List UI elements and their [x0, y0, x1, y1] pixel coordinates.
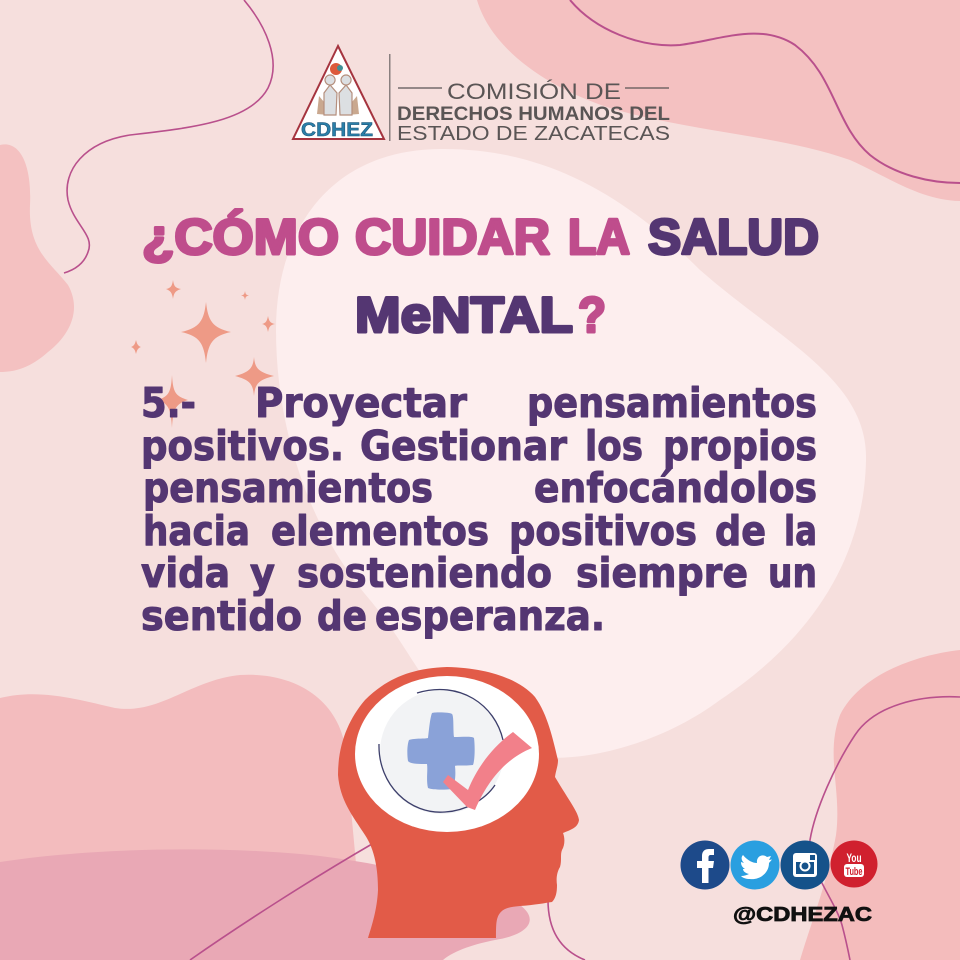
- title: LA: [568, 209, 630, 265]
- icon: head with cross and check: [338, 667, 579, 938]
- title: MeNTAL: [355, 287, 573, 343]
- body text: pensamientos: [143, 464, 433, 512]
- curve: bottom left: [190, 844, 372, 960]
- icons: social media: [680, 840, 878, 890]
- body text: 5.-: [141, 379, 196, 427]
- body text: siempre: [576, 549, 748, 597]
- title: CUIDAR: [355, 209, 550, 265]
- body text: vida: [141, 549, 230, 597]
- title: ?: [578, 287, 606, 343]
- body text: un: [768, 549, 817, 597]
- grey circle: [380, 690, 504, 814]
- body text: sentido: [141, 592, 302, 640]
- sparkles: [131, 280, 275, 428]
- check mark: [443, 732, 532, 810]
- blob: central light shape: [276, 149, 866, 758]
- body text: de: [715, 507, 766, 555]
- title: [142, 209, 819, 343]
- logo: organisation name: COMISIÓN DE: [447, 79, 621, 104]
- body text: la: [784, 507, 817, 555]
- logo: organisation name: [397, 79, 670, 145]
- curve: top left: [64, 0, 273, 273]
- blob: bottom left: [0, 675, 365, 960]
- blue cross: [407, 712, 475, 790]
- body text: Gestionar: [360, 422, 568, 470]
- social handle: @CDHEZAC: [733, 904, 872, 926]
- logo: organisation name: ESTADO DE ZACATECAS: [397, 122, 670, 145]
- body text: de: [317, 592, 367, 640]
- blob: left edge: [0, 144, 74, 372]
- blob: bottom left dark: [0, 849, 530, 960]
- body text: los: [585, 422, 643, 470]
- curve: top right: [570, 0, 960, 183]
- body text: positivos.: [141, 422, 344, 470]
- title: SALUD: [648, 209, 819, 265]
- body text: Proyectar: [255, 379, 468, 427]
- logo: CDHEZ triangle: CDHEZ: [301, 120, 373, 141]
- body text: pensamientos: [527, 379, 817, 427]
- head silhouette: [338, 667, 579, 938]
- body text: y: [250, 549, 275, 597]
- body text: [141, 379, 817, 640]
- body text: sosteniendo: [297, 549, 552, 597]
- curve: under chin: [548, 900, 585, 960]
- circle outline: [379, 690, 503, 812]
- body text: propios: [663, 422, 817, 470]
- logo: divider: [389, 54, 390, 141]
- curve: bottom right: [810, 697, 960, 960]
- logo: CDHEZ triangle: [293, 46, 384, 141]
- body text: hacia: [143, 507, 250, 555]
- body text: elementos: [271, 507, 489, 555]
- icon: facebook: [680, 840, 730, 890]
- icon: youtube: You: [846, 851, 862, 865]
- icon: instagram: [780, 840, 830, 890]
- icon: youtube: [830, 840, 878, 888]
- logo: organisation name: DERECHOS HUMANOS DEL: [397, 103, 670, 125]
- blob: bottom right: [800, 650, 960, 960]
- blob: top right: [477, 0, 960, 201]
- body text: positivos: [509, 507, 697, 555]
- white oval: [355, 676, 539, 832]
- icon: twitter: [730, 840, 780, 890]
- icon: youtube: Tube: [846, 866, 862, 878]
- body text: esperanza.: [375, 592, 605, 640]
- body text: enfocándolos: [534, 464, 817, 512]
- title: ¿CÓMO: [142, 209, 339, 265]
